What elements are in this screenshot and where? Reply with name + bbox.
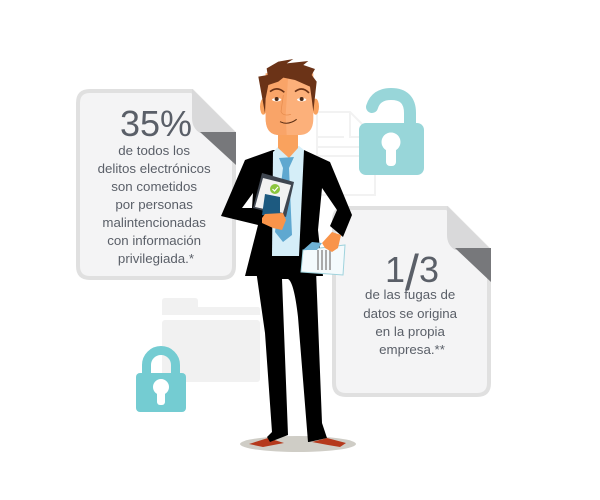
businessman character — [221, 59, 356, 452]
face — [266, 73, 313, 135]
description text: en la propia — [375, 324, 445, 339]
description text: malintencionadas — [102, 215, 206, 230]
shirt — [272, 146, 304, 256]
neck — [278, 133, 298, 158]
description text: por personas — [115, 197, 193, 212]
figure 35%: 35% — [120, 103, 192, 144]
paper sheet — [301, 245, 345, 275]
description text: delitos electrónicos — [98, 161, 211, 176]
description text: empresa.** — [379, 342, 445, 357]
background folder icon — [162, 298, 260, 382]
tablet folder icon — [262, 194, 280, 217]
description text: de las fugas de — [365, 287, 455, 302]
padlock: open, top right — [359, 94, 424, 175]
jacket — [221, 150, 352, 276]
ears — [260, 99, 267, 115]
figure 1/3: 3 — [419, 249, 439, 290]
description text: datos se origina — [363, 306, 458, 321]
figure 1/3: / — [405, 245, 419, 301]
shoes — [249, 438, 346, 447]
hand holding tablet — [262, 213, 286, 230]
paper fold — [303, 242, 322, 250]
description text: de todos los — [118, 143, 190, 158]
hair — [258, 59, 317, 113]
folded corner — [192, 89, 236, 133]
panel: 1/3 statistic — [334, 206, 491, 395]
description text: con información — [107, 233, 201, 248]
tablet screen — [255, 178, 291, 213]
card shape — [334, 208, 489, 395]
eyebrows — [270, 89, 309, 93]
tablet — [253, 173, 294, 217]
tie — [275, 157, 294, 242]
background document icon — [317, 112, 375, 195]
figure 1/3: 1 — [385, 249, 405, 290]
nose — [281, 95, 291, 115]
mouth — [280, 119, 297, 123]
trousers — [256, 270, 327, 442]
green check — [270, 184, 280, 194]
card shape — [78, 91, 234, 278]
gap between arm and body — [242, 193, 253, 208]
description text: son cometidos — [111, 179, 197, 194]
hand holding paper — [322, 232, 341, 252]
eyes — [272, 98, 281, 101]
padlock: closed, bottom left — [136, 350, 186, 412]
fold shadow — [200, 132, 236, 165]
barcode on paper — [318, 250, 330, 270]
folded corner — [447, 206, 491, 250]
fold shadow — [455, 248, 491, 282]
ground shadow — [240, 436, 356, 452]
description text: privilegiada.* — [118, 251, 194, 266]
panel: 35% statistic — [78, 89, 236, 278]
